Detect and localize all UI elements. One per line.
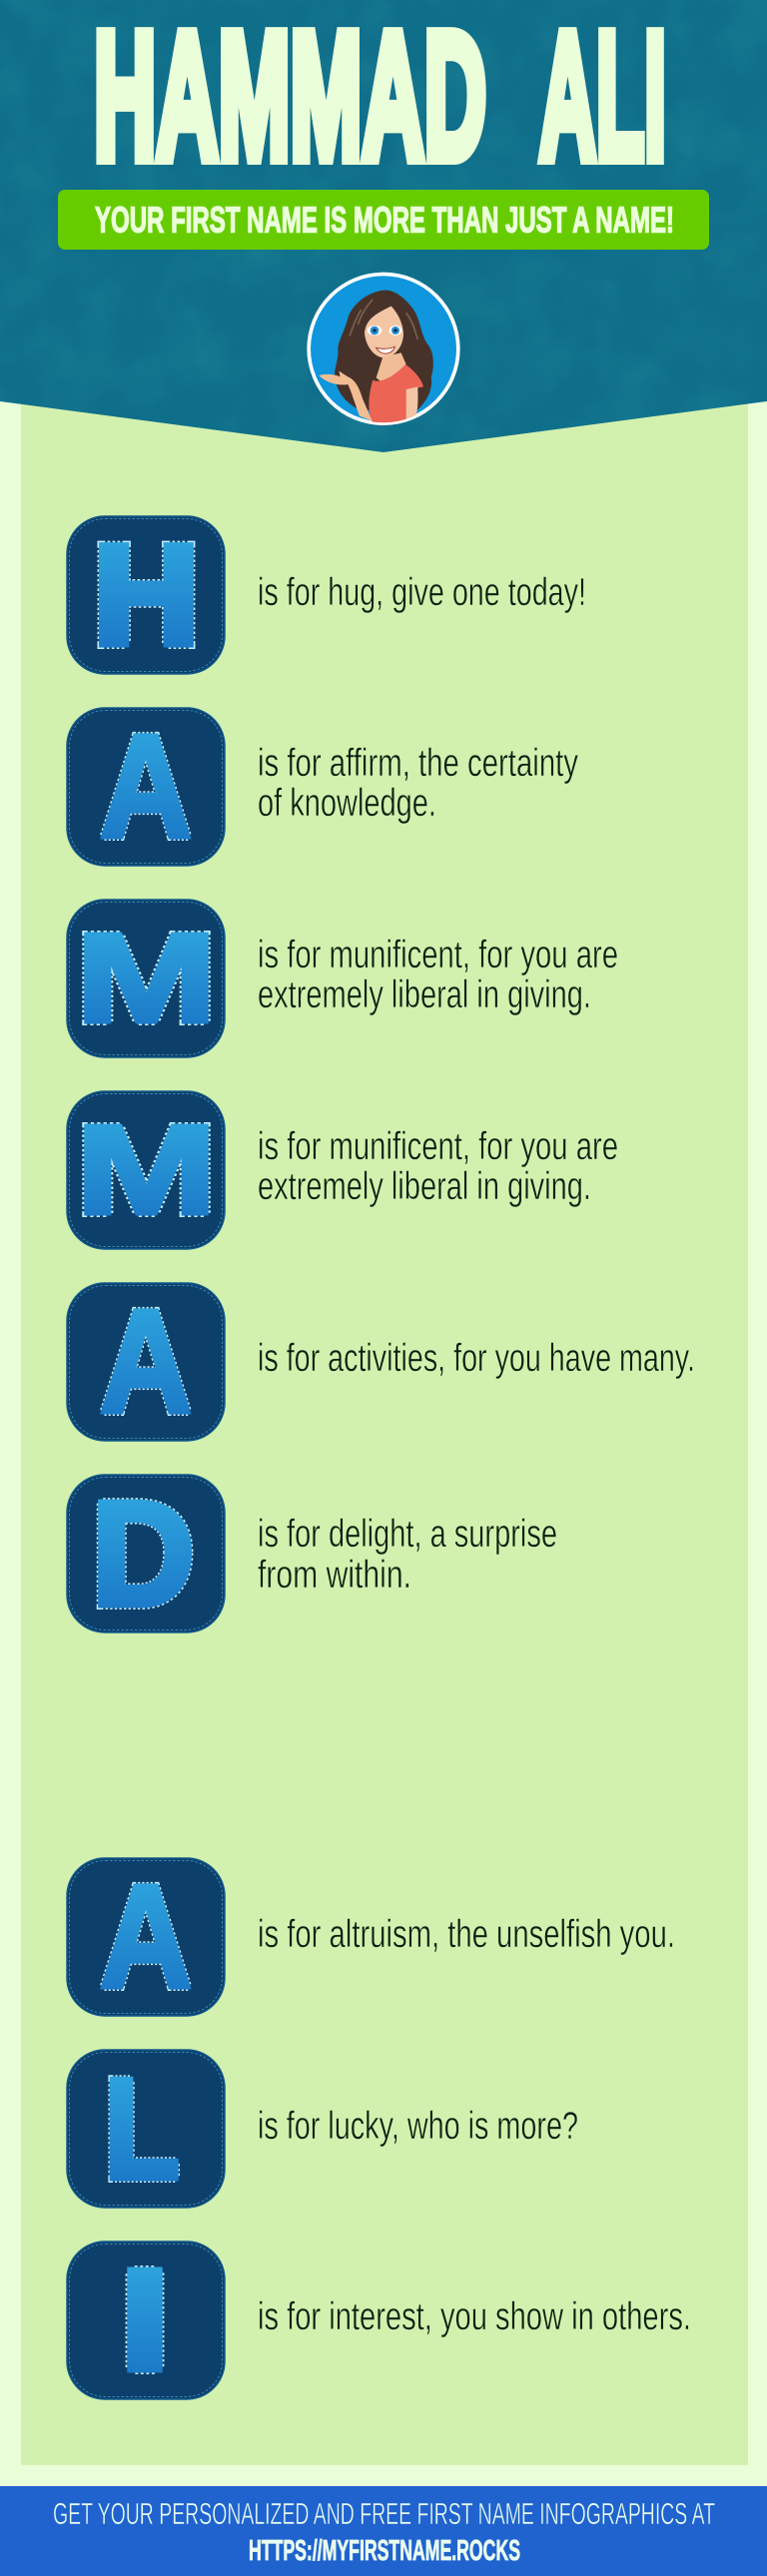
letter row H	[67, 516, 586, 674]
footer	[0, 2486, 767, 2576]
icon: letter H tile: H	[94, 516, 199, 673]
icon: letter H tile: H	[94, 516, 199, 673]
icon: letter M tile: M	[76, 1098, 218, 1242]
icon: letter A tile: A	[100, 705, 192, 869]
icon: letter A tile	[67, 1855, 225, 2019]
header chevron	[0, 0, 767, 459]
letter row I	[67, 2242, 691, 2399]
letter row A	[67, 705, 578, 869]
icon: letter H tile	[67, 516, 225, 674]
text: D meaning: is for delight, a surprise	[258, 1513, 557, 1556]
letter row M	[67, 900, 618, 1057]
icon: letter A tile: A	[100, 1280, 192, 1444]
text: M meaning: extremely liberal in giving.	[258, 973, 591, 1016]
icon: letter A tile	[67, 705, 225, 869]
text: A meaning: of knowledge.	[258, 782, 436, 825]
icon: letter A tile: A	[100, 1280, 192, 1444]
icon: letter D tile: D	[92, 1472, 195, 1636]
icon: letter M tile: M	[76, 907, 218, 1050]
text: L meaning: is for lucky, who is more?	[258, 2105, 578, 2148]
text: M meaning: is for munificent, for you are	[258, 934, 618, 976]
letter row L	[67, 2050, 578, 2209]
text: H meaning: is for hug, give one today!	[258, 571, 586, 614]
text: D meaning: from within.	[258, 1554, 411, 1597]
icon: letter I tile	[67, 2242, 225, 2399]
icon: letter M tile	[67, 1091, 225, 1249]
footer: HTTPS://MYFIRSTNAME.ROCKS	[249, 2535, 520, 2567]
icon: letter I tile: I	[123, 2244, 167, 2397]
icon: letter L tile: L	[104, 2050, 180, 2209]
text: M meaning: extremely liberal in giving.	[258, 1165, 591, 1208]
letter row A second	[67, 1280, 695, 1444]
letter row M second	[67, 1091, 618, 1249]
text: A meaning: is for affirm, the certainty	[258, 742, 578, 785]
subtitle banner	[58, 190, 709, 250]
icon: letter A tile: A	[100, 705, 192, 869]
icon: letter L tile: L	[104, 2050, 180, 2209]
icon: letter M tile	[67, 900, 225, 1057]
icon: letter A tile: A	[100, 1855, 192, 2019]
icon: letter A tile	[67, 1280, 225, 1444]
icon: letter M tile: M	[76, 907, 218, 1050]
icon: letter M tile: M	[76, 1098, 218, 1242]
icon: letter A tile: A	[100, 1855, 192, 2019]
icon: letter D tile: D	[92, 1472, 195, 1636]
content panel	[21, 379, 748, 2465]
icon: letter L tile	[67, 2050, 225, 2209]
icon: letter I tile: I	[123, 2244, 167, 2397]
letter row A third	[67, 1855, 675, 2019]
icon: letter D tile	[67, 1472, 225, 1636]
letter row D	[67, 1472, 557, 1636]
text: M meaning: is for munificent, for you are	[258, 1125, 618, 1168]
icon: avatar of smiling woman	[307, 273, 460, 425]
